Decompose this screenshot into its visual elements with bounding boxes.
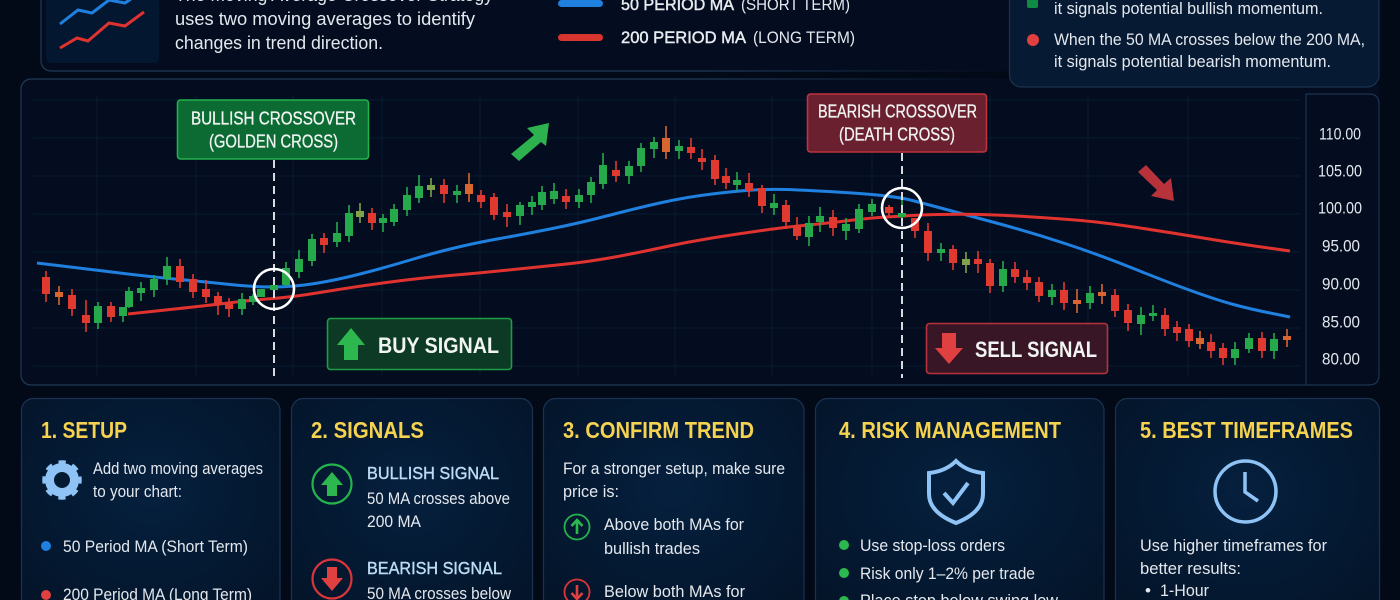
bearish signal text: BEARISH SIGNAL [367, 558, 502, 578]
price axis labels [1318, 126, 1362, 368]
icon: up arrow [337, 328, 365, 360]
icon: crossover lines [46, 0, 159, 63]
callout: sell signal: SELL SIGNAL [975, 337, 1097, 362]
heading: confirm trend: 3. CONFIRM TREND [563, 417, 754, 443]
candlesticks [46, 126, 1287, 365]
callout: bullish crossover [178, 100, 368, 159]
marker: bullish crossover line [273, 160, 275, 378]
callout: sell signal [926, 324, 1108, 374]
arrow: uptrend [511, 123, 549, 161]
bullish signal text: 200 MA [367, 512, 422, 531]
marker: bearish crossover line [901, 153, 903, 378]
list item: 50 period: 50 Period MA (Short Term) [63, 537, 248, 556]
bullish signal text: BULLISH SIGNAL [367, 463, 499, 483]
timeframes text: better results: [1140, 559, 1241, 578]
marker: golden cross circle [254, 269, 294, 309]
price axis labels: 110.00 [1319, 126, 1361, 144]
timeframes text: • [1145, 581, 1151, 600]
bullet: bullish [1027, 0, 1038, 8]
legend: (LONG TERM) [753, 28, 855, 47]
moving average 200 line [128, 214, 1290, 314]
bullet: bearish [1027, 34, 1039, 46]
panel: crossover explanation: When the 50 MA crosses below the 200 MA, [1054, 30, 1365, 49]
callout: bullish crossover: BULLISH CROSSOVER [191, 108, 356, 128]
above text: Above both MAs for [604, 515, 744, 534]
bullish signal text [367, 463, 510, 531]
icon: shield [929, 461, 983, 523]
callout: bearish crossover [808, 94, 986, 152]
callout: bullish crossover: (GOLDEN CROSS) [209, 132, 338, 152]
icon: bullish signal [312, 464, 352, 504]
above text [604, 515, 744, 558]
icon: above [564, 514, 590, 540]
confirm text [563, 459, 785, 501]
panel: 2 signals [292, 398, 532, 600]
marker: death cross circle [882, 188, 922, 228]
callout: buy signal: BUY SIGNAL [378, 333, 499, 358]
price axis labels: 85.00 [1322, 314, 1360, 332]
confirm text: price is: [563, 482, 619, 501]
setup text: to your chart: [93, 482, 182, 501]
price axis labels: 100.00 [1318, 200, 1362, 218]
price axis labels: 90.00 [1322, 276, 1360, 294]
setup text: Add two moving averages [93, 459, 263, 478]
icon: below [564, 580, 590, 600]
panel: 5 best timeframes [1116, 398, 1380, 600]
price axis labels: 80.00 [1322, 350, 1360, 368]
panel: crossover explanation: it signals potential bearish momentum. [1054, 52, 1331, 71]
price axis labels: 95.00 [1322, 238, 1360, 256]
panel: 3 confirm trend [544, 398, 804, 600]
bullish signal text: 50 MA crosses above [367, 489, 510, 508]
setup text [93, 459, 263, 501]
panel: crossover explanation [1010, 0, 1379, 87]
intro text [175, 0, 493, 53]
timeframes text: 1-Hour [1160, 581, 1209, 600]
intro text: uses two moving averages to identify [175, 9, 475, 29]
panel: chart [21, 79, 1379, 385]
legend: 200 PERIOD MA [621, 28, 747, 47]
above text: bullish trades [604, 539, 700, 558]
timeframes text [1140, 536, 1327, 600]
callout: bearish crossover: BEARISH CROSSOVER [818, 102, 977, 122]
panel: 1 setup [22, 398, 280, 600]
heading: risk management: 4. RISK MANAGEMENT [839, 417, 1061, 443]
confirm text: For a stronger setup, make sure [563, 459, 785, 478]
callout: buy signal [328, 318, 512, 370]
heading: signals: 2. SIGNALS [311, 417, 424, 443]
callout: bearish crossover: (DEATH CROSS) [839, 124, 955, 144]
heading: setup: 1. SETUP [41, 417, 127, 443]
bearish signal text [367, 558, 512, 600]
intro text: changes in trend direction. [175, 33, 383, 53]
icon: clock [1215, 461, 1276, 522]
moving average 50 line [37, 189, 1290, 317]
panel: intro header [41, 0, 1141, 71]
timeframes text: Use higher timeframes for [1140, 536, 1327, 555]
price axis labels: 105.00 [1318, 162, 1362, 180]
icon: bearish signal [312, 560, 352, 598]
panel: 4 risk management [816, 398, 1104, 600]
legend [558, 0, 855, 47]
arrow: downtrend [1138, 165, 1174, 201]
list item: stop-loss: Use stop-loss orders [860, 536, 1005, 555]
icon: gear [44, 462, 80, 498]
list item: risk: Risk only 1–2% per trade [860, 564, 1035, 583]
heading: best timeframes: 5. BEST TIMEFRAMES [1140, 417, 1353, 443]
icon: down arrow [935, 333, 963, 364]
